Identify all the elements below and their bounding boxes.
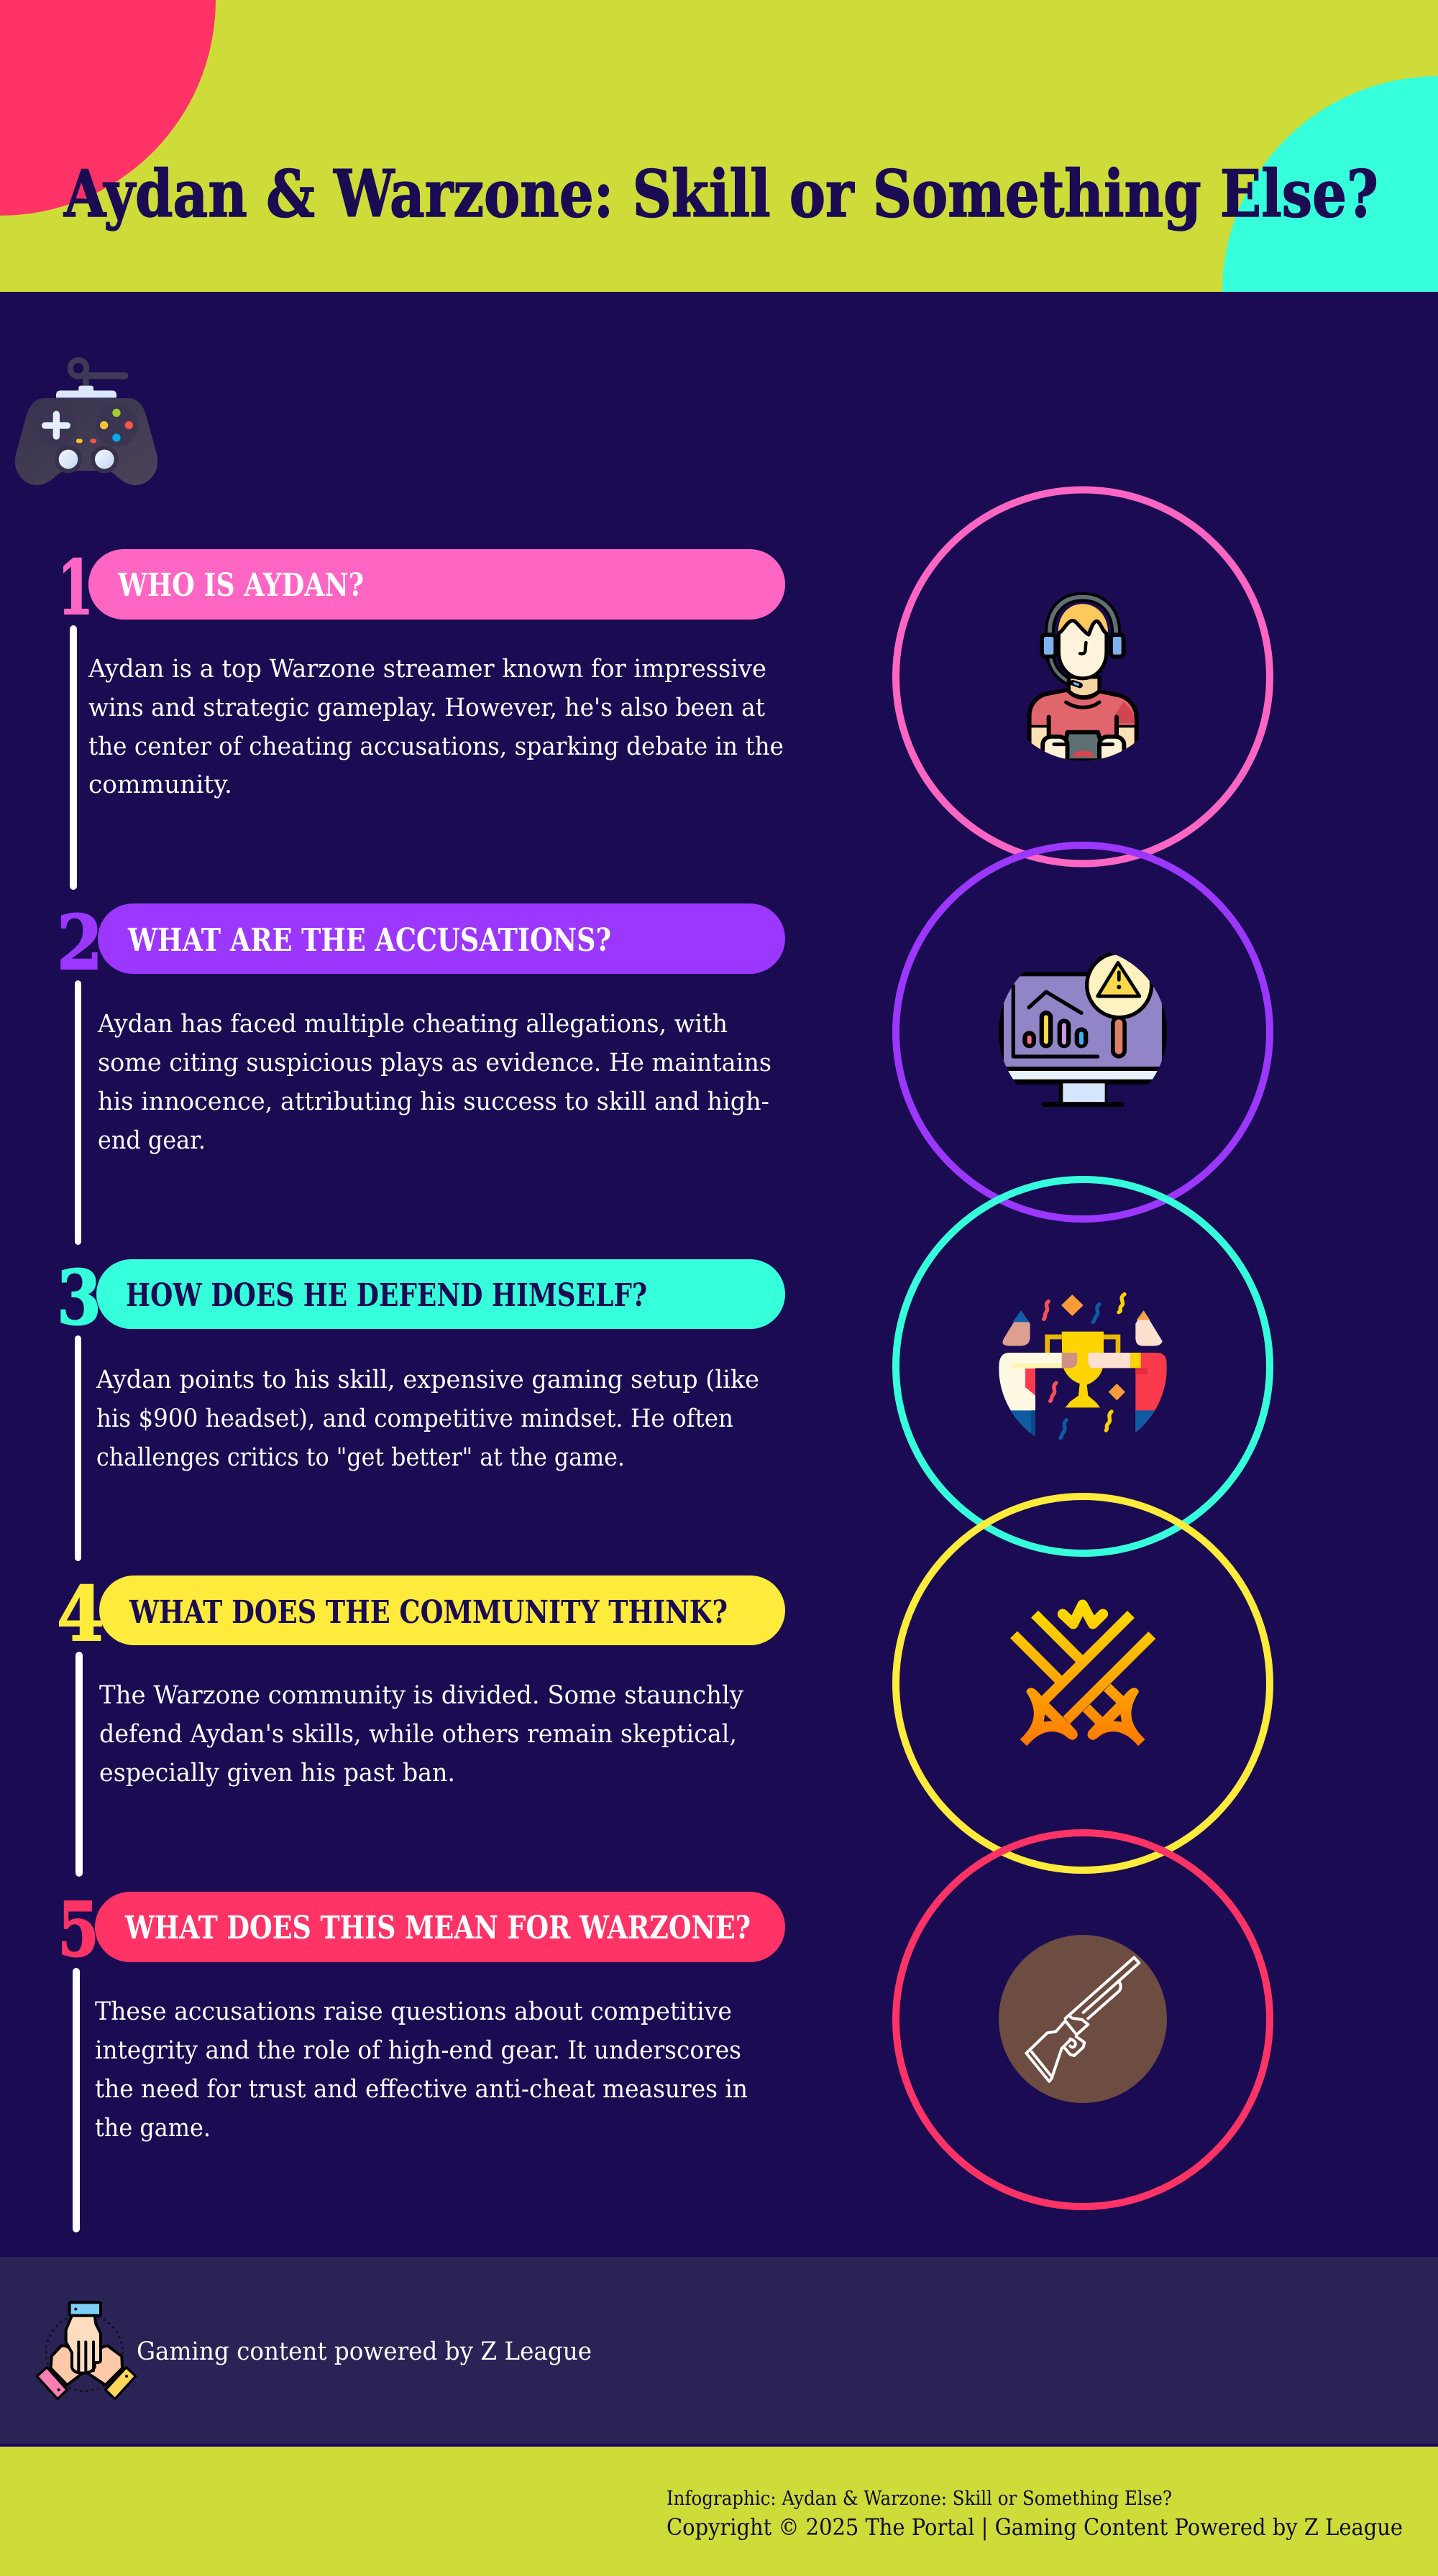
vertical rule 5 — [73, 1968, 80, 2232]
vertical rule 4 — [75, 1652, 83, 1877]
heading pill 4 — [99, 1576, 785, 1645]
panel: what does this mean for Warzone — [58, 1885, 785, 2232]
icon: gamer with headset — [1030, 597, 1137, 765]
body text 2: his innocence, attributing his success to skill and high- — [98, 1087, 769, 1116]
vertical rule 3 — [75, 1335, 81, 1561]
heading 5: WHAT DOES THIS MEAN FOR WARZONE? — [124, 1910, 751, 1946]
heading pill 3 — [96, 1259, 785, 1329]
number 2: 2 — [57, 898, 103, 987]
body text 5 — [95, 1997, 748, 2143]
ring: teal circle — [896, 1179, 1270, 1553]
decorative teal circle — [1222, 76, 1438, 292]
body text 4: especially given his past ban. — [99, 1759, 455, 1788]
heading 3: HOW DOES HE DEFEND HIMSELF? — [126, 1277, 647, 1314]
body text 4: defend Aydan's skills, while others remain skeptical, — [99, 1720, 737, 1749]
ring: pink circle — [896, 490, 1270, 864]
body text 2 — [97, 1010, 771, 1155]
icon: monitor with warning magnifier — [997, 953, 1168, 1105]
heading pill 5 — [95, 1892, 785, 1962]
ring: yellow circle — [896, 1496, 1270, 1870]
icon: game controller — [15, 360, 157, 485]
body text 1: Aydan is a top Warzone streamer known for impressive — [88, 655, 766, 684]
body text 2: end gear. — [98, 1126, 206, 1155]
heading pill 1 — [88, 549, 785, 620]
body text 5: the game. — [95, 2114, 211, 2143]
heading pill 2 — [98, 903, 785, 974]
number 4: 4 — [57, 1570, 104, 1658]
powered by text: Gaming content powered by Z League — [137, 2337, 592, 2366]
icon: trophy and confetti — [999, 1294, 1169, 1447]
body text 2: Aydan has faced multiple cheating allegations, with — [97, 1010, 728, 1039]
vertical rule 1 — [70, 625, 77, 890]
body text 1: community. — [88, 770, 232, 799]
body text 1: the center of cheating accusations, sparking debate in the — [88, 732, 784, 761]
icon: crossed swords and crown — [1014, 1605, 1152, 1746]
body text 3: his $900 headset), and competitive mindset. He often — [96, 1404, 733, 1433]
body text 2: some citing suspicious plays as evidence. He maintains — [98, 1049, 771, 1077]
panel: what are the accusations — [57, 898, 785, 1245]
panel: how does he defend himself — [57, 1254, 785, 1561]
ring: purple circle — [896, 845, 1270, 1219]
number 5: 5 — [58, 1885, 99, 1974]
footer band — [0, 2447, 1438, 2576]
icon: joined hands — [37, 2302, 136, 2399]
heading 1: WHO IS AYDAN? — [117, 567, 364, 604]
number 3: 3 — [57, 1254, 101, 1342]
heading 2: WHAT ARE THE ACCUSATIONS? — [127, 922, 611, 959]
heading 4: WHAT DOES THE COMMUNITY THINK? — [129, 1594, 728, 1631]
body text 1: wins and strategic gameplay. However, he's also been at — [88, 694, 765, 722]
body text 3: challenges critics to "get better" at the game. — [96, 1443, 625, 1472]
footer title line: Infographic: Aydan & Warzone: Skill or Something Else? — [667, 2488, 1172, 2510]
body text 4 — [99, 1681, 743, 1788]
vertical rule 2 — [75, 980, 81, 1245]
body text 5: These accusations raise questions about competitive — [95, 1997, 732, 2026]
body text 5: integrity and the role of high-end gear. It underscores — [95, 2036, 741, 2065]
ring: red circle — [896, 1833, 1270, 2207]
body text 1 — [88, 655, 784, 799]
decorative red circle — [0, 0, 216, 216]
body text 3 — [96, 1366, 759, 1472]
panel: who is Aydan — [58, 543, 785, 890]
body text 5: the need for trust and effective anti-cheat measures in — [95, 2075, 748, 2104]
header band — [0, 0, 1438, 292]
icon: rifle on brown disc — [999, 1935, 1167, 2103]
footer panel: powered by — [0, 2255, 1438, 2447]
panel: what does the community think — [57, 1570, 785, 1877]
number 1: 1 — [58, 543, 93, 632]
body text 4: The Warzone community is divided. Some staunchly — [99, 1681, 743, 1710]
body text 3: Aydan points to his skill, expensive gaming setup (like — [96, 1366, 759, 1394]
